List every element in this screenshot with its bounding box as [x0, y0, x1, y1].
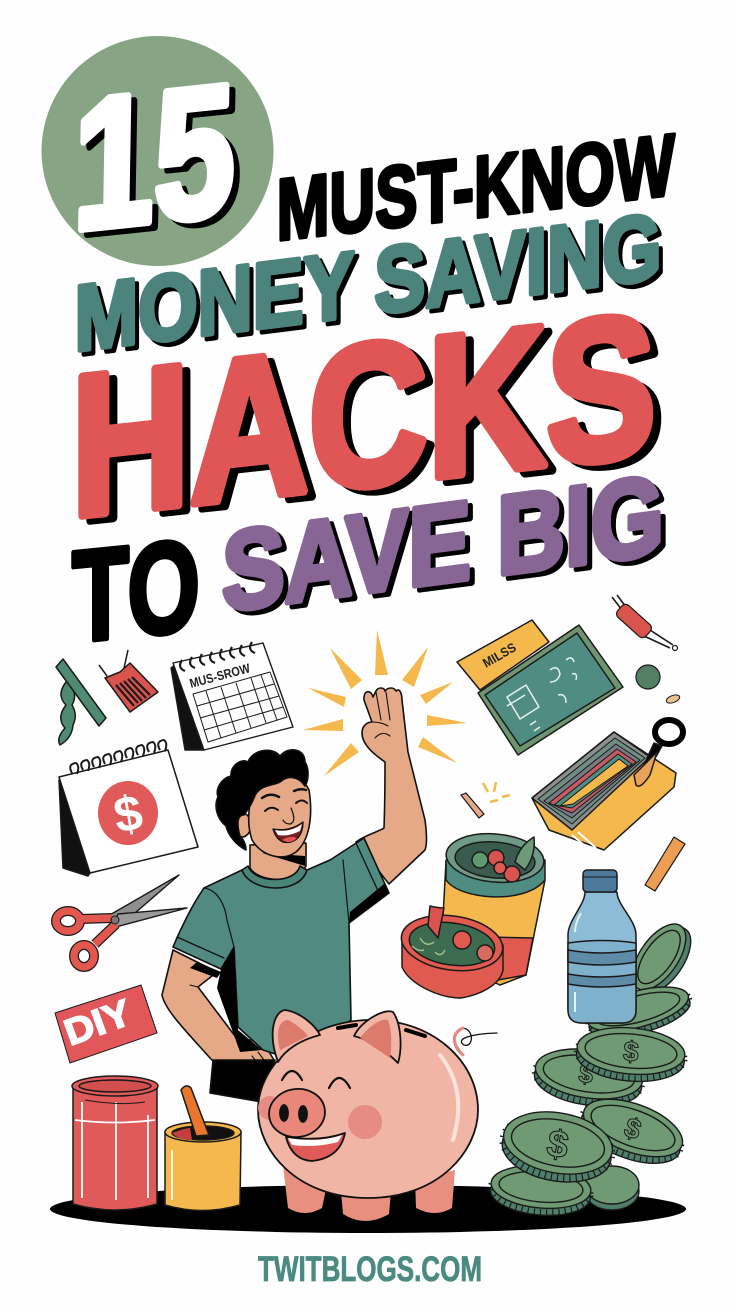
icon: teal card with yellow card: MILSS [480, 639, 519, 671]
icon: red can [72, 1076, 158, 1210]
icon: teal card with yellow card [457, 620, 623, 755]
coin right lower: $ [620, 1111, 646, 1146]
icon: calendar with dollar: $ [110, 784, 147, 844]
icon: green button [636, 665, 660, 689]
coin behind bottle [622, 915, 701, 1002]
hair [216, 750, 308, 850]
heading: to: TO [72, 512, 200, 670]
coin large front [497, 1104, 617, 1190]
pig eyes [282, 1071, 350, 1088]
footer url: TWITBLOGS.COM [258, 1250, 482, 1289]
person [162, 688, 426, 1102]
coin bottom left [489, 1162, 593, 1219]
pig body [258, 1020, 478, 1198]
icon: small stick and sparks [461, 782, 510, 818]
coin bottom right back [585, 1166, 639, 1210]
icon: scissors [56, 875, 187, 967]
icon: salad cup [439, 830, 546, 985]
icon: monthly calendar: MUS-SROW [188, 660, 252, 691]
raised arm and hand [356, 688, 426, 884]
icon: sun rays [303, 630, 467, 776]
pig cheeks [348, 1105, 382, 1139]
shorts [210, 1060, 275, 1102]
coin right lower [574, 1088, 690, 1175]
tilted coin under bottle [583, 978, 694, 1046]
icon: tan bean [665, 693, 681, 705]
icon: green bar and rope [56, 659, 106, 745]
neck and collar [250, 843, 306, 879]
icon: diy tag: DIY [59, 992, 137, 1054]
pig snout [266, 1085, 328, 1141]
shirt [173, 838, 389, 1062]
pig ears [273, 1010, 320, 1062]
badge circle [42, 36, 274, 266]
pig slot [338, 1025, 425, 1036]
icon: price tag [99, 650, 158, 712]
icon: calendar with dollar [59, 740, 198, 876]
icon: red bowl [398, 906, 506, 998]
icon: yellow cup with stick [165, 1086, 241, 1210]
scissor handle [636, 743, 662, 785]
coin upper [575, 1023, 687, 1086]
pig legs [283, 1165, 455, 1221]
coin stack [489, 915, 701, 1219]
heading: save big: SAVE BIG [222, 451, 664, 635]
face [249, 777, 311, 857]
viewer-left arm [162, 950, 274, 1089]
icon: orange stick [645, 837, 685, 891]
icon: monthly calendar [171, 642, 293, 750]
ground shadow [50, 1185, 686, 1233]
ear [233, 813, 251, 837]
icon: diy tag [55, 985, 157, 1063]
number 15: 15 [77, 49, 243, 275]
pig mouth [286, 1133, 345, 1161]
coin left in middle [531, 1043, 646, 1112]
coin large front: $ [544, 1122, 572, 1167]
facial features [262, 789, 307, 842]
icon: red keychain [612, 595, 678, 650]
icon: water bottle [568, 870, 636, 1023]
icon: yellow lunch tin [532, 720, 683, 850]
coin left in middle: $ [577, 1058, 596, 1090]
icon: piggy bank [258, 1010, 497, 1221]
coin upper: $ [622, 1035, 640, 1068]
number 15: 15 [71, 44, 237, 270]
pig tail [454, 1028, 497, 1055]
pig highlight [440, 1055, 458, 1140]
